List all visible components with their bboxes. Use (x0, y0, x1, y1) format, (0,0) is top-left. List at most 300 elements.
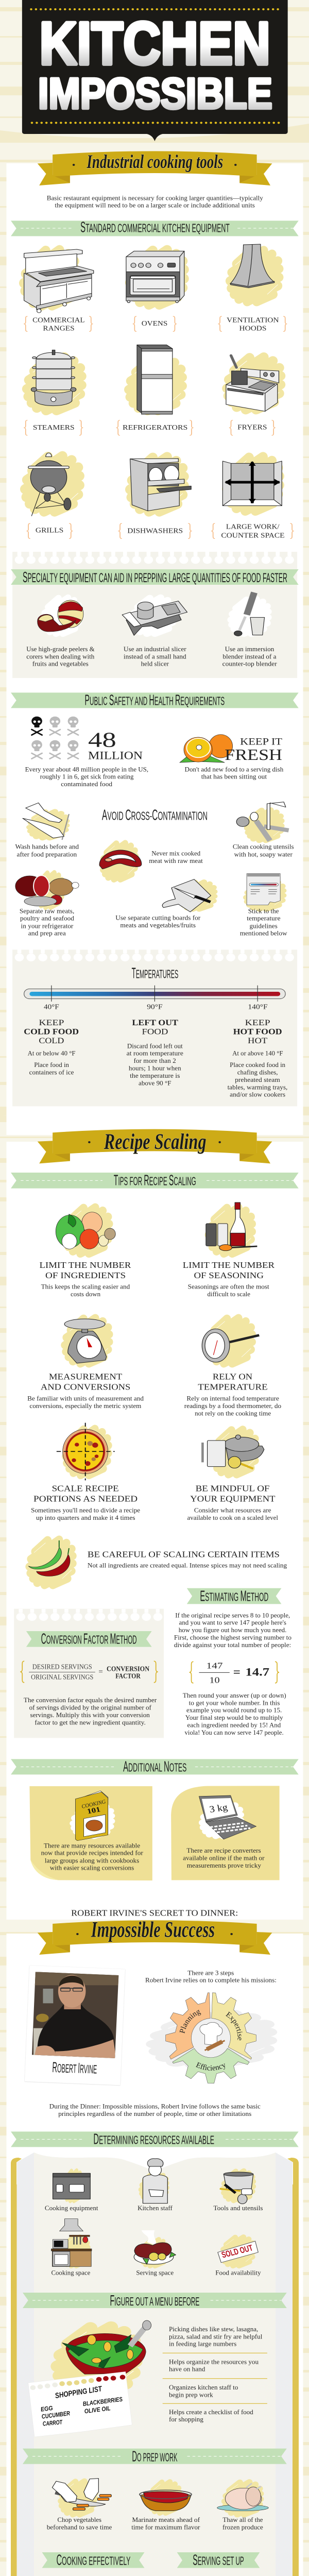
banner: public safety and health requirements (11, 692, 299, 708)
label (229, 420, 276, 435)
text: measurements prove tricky (187, 1862, 261, 1869)
icon: cookbook: 101 (87, 1806, 101, 1816)
text: corers when dealing with (26, 653, 94, 660)
text: estimating intro: how you figure out how much you need. (179, 1626, 286, 1634)
panel: specialty equipment (11, 552, 299, 678)
text (222, 646, 277, 667)
column: left out food: Discard food left out (127, 1042, 183, 1049)
icon: steak (99, 850, 142, 869)
temperature labels: 40°F (44, 1004, 59, 1011)
book main page (34, 2153, 276, 2576)
banner: do prep work: DO PREP WORK (132, 2448, 178, 2465)
label (26, 523, 73, 538)
text: temperature (247, 915, 281, 922)
text (124, 646, 186, 667)
banner: additional notes (11, 1758, 299, 1775)
temperature labels: 140°F (248, 1004, 268, 1011)
text (31, 1483, 140, 1521)
banner: public safety and health requirements: PUBLIC SAFETY AND HEALTH REQUIREMENTS (85, 692, 225, 708)
item: fryers (226, 355, 281, 435)
text: Consider what resources are (194, 1506, 271, 1514)
note card: cookbooks (29, 1786, 152, 1880)
gear labels: Expertise (226, 2011, 242, 2040)
icon: peeled apple (38, 600, 83, 632)
text: estimating explanation: Your final step would be to multiply (185, 1714, 283, 1721)
text: Chop vegetables (57, 2516, 101, 2523)
text: There are recipe converters (186, 1847, 261, 1854)
icon: cookbook: COOKING (81, 1799, 107, 1810)
icon: chili peppers (28, 1540, 70, 1576)
text: SCALE RECIPE (52, 1483, 119, 1493)
banner: figure out a menu before (23, 2293, 287, 2309)
column: keep cold food cold: KEEP (39, 1018, 64, 1027)
label: DISHWASHERS (127, 527, 183, 535)
banner: conversion factor method: CONVERSION FACTOR METHOD (41, 1631, 137, 1647)
icon: oranges (180, 735, 233, 762)
icon: salad bowl (62, 2320, 151, 2374)
shopping list note: CUCUMBER (41, 2410, 71, 2420)
formula: conversion factor: DESIRED SERVINGS (32, 1663, 92, 1671)
list: why plan the menu: Organizes kitchen staff to (169, 2384, 238, 2391)
text: time for maximum flavor (131, 2523, 200, 2531)
text: now that provide recipes intended for (41, 1850, 143, 1856)
text: estimating explanation (183, 1692, 286, 1736)
label: GRILLS (36, 527, 63, 534)
heading: avoid cross-contamination: AVOID CROSS-CONTAMINATION (102, 807, 208, 823)
text: conversion factor explanation: factor to get the new ingredient quantity. (35, 1719, 146, 1726)
text: estimating explanation: example you would round up to 15. (186, 1707, 282, 1714)
column: left out food: the temperature is (130, 1072, 180, 1079)
text: Not all ingredients are created equal. Intense spices may not need scaling (88, 1562, 287, 1569)
text (185, 766, 283, 780)
text: estimating intro: and you want to serve 147 people here's (179, 1619, 286, 1626)
text: conversion factor explanation: of servings divided by the original number of (29, 1704, 151, 1711)
item: separate raw meats (15, 873, 79, 937)
panel: conversion factor method (14, 1609, 164, 1738)
item: ovens (126, 250, 184, 331)
text: BE CAREFUL OF SCALING CERTAIN ITEMS (88, 1550, 280, 1559)
column: keep hot food hot (228, 1018, 287, 1098)
item: salad bowl and shopping list (28, 2320, 151, 2437)
item: immersion blender (222, 592, 277, 667)
label (24, 316, 93, 332)
label: RANGES (43, 325, 75, 332)
column: keep hot food hot: and/or slow cookers (230, 1091, 285, 1098)
text: conversions, especially the metric system (29, 1402, 142, 1410)
column: keep hot food hot: preheated steam (235, 1076, 280, 1083)
list: why plan the menu: Picking dishes like stew, lasagna, (169, 2326, 258, 2333)
text: estimating explanation: each ingredient needed by 15! And (187, 1722, 281, 1728)
section: public safety (15, 717, 294, 937)
text: beforehand to save time (47, 2523, 112, 2531)
resource: tools and utensils (213, 2171, 263, 2212)
text: mentioned below (240, 930, 287, 937)
text: TEMPERATURE (198, 1382, 268, 1392)
text: Don't add new food to a serving dish (185, 766, 283, 773)
tip: rely on temperature (184, 1318, 281, 1417)
icon: slicer (122, 601, 187, 635)
icon: steamer (31, 350, 76, 406)
text: in your refrigerator (21, 922, 74, 929)
text: after food preparation (17, 851, 77, 858)
item: never mix meat (99, 843, 203, 879)
gear centre with chef hat and rolling pin (193, 2020, 230, 2057)
item: large work counter space (211, 457, 294, 539)
text (20, 907, 74, 937)
text (115, 914, 201, 929)
resource: food availability (215, 2237, 261, 2276)
banner: figure out a menu before: FIGURE OUT A MENU BEFORE (110, 2293, 199, 2309)
list: why plan the menu: begin prep work (169, 2391, 213, 2398)
icon: grill (28, 453, 71, 516)
gear segment: planning (149, 1988, 229, 2060)
text: instead of a small hand (124, 653, 186, 660)
icon: hands (23, 803, 69, 840)
item: clean utensils (233, 802, 294, 858)
text: OF INGREDIENTS (45, 1270, 126, 1280)
text (187, 1483, 278, 1521)
formula: estimating: 147 (207, 1660, 222, 1671)
list: why plan the menu: Helps organize the resources you (169, 2358, 259, 2365)
column: keep hot food hot: Place cooked food in (230, 1061, 285, 1069)
item: grills (25, 453, 79, 538)
column: keep hot food hot: chafing dishes, (237, 1069, 278, 1076)
formula: conversion factor: FACTOR (115, 1672, 141, 1680)
text: Thaw all of the (222, 2516, 263, 2523)
equipment grid (24, 244, 287, 435)
scribble behind gear (156, 2014, 267, 2064)
text: BE MINDFUL OF (196, 1483, 270, 1493)
text: LIMIT THE NUMBER (183, 1260, 274, 1270)
formula: estimating: = (233, 1666, 241, 1679)
icon: vegetables (56, 1212, 115, 1249)
ribbon: impossible success: Impossible Success (91, 1917, 215, 1942)
text (184, 1372, 281, 1417)
shopping list note: BLACKBERRIES (82, 2396, 123, 2408)
column: keep hot food hot: KEEP (245, 1018, 270, 1027)
icon: chef (143, 2159, 167, 2204)
label: HOODS (239, 325, 266, 332)
panel: temperatures: TEMPERATURES (132, 965, 178, 981)
item: temperature guidelines (240, 874, 287, 937)
text: estimating intro: If the original recipe serves 8 to 10 people, (175, 1612, 290, 1619)
prep: marinate meats (131, 2482, 200, 2531)
label (24, 420, 83, 435)
ribbon: impossible success (38, 1917, 272, 1955)
icon: pizza cut into quarters (57, 1423, 115, 1480)
dotted rules (31, 9, 279, 123)
shopping list note: SHOPPING LIST (55, 2385, 103, 2400)
banner: additional notes: ADDITIONAL NOTES (123, 1758, 186, 1775)
label: COMMERCIAL (32, 316, 85, 324)
text: and prep area (28, 930, 66, 937)
text: conversion factor explanation: servings. Multiply this with your conversion (30, 1711, 150, 1719)
icon: kitchen (51, 2219, 92, 2266)
text: difficult to scale (208, 1291, 250, 1298)
icon: cutting board (162, 879, 211, 912)
column: keep cold food cold: COLD FOOD (24, 1027, 79, 1036)
caption: Robert Irvine: ROBERT IRVINE (52, 2059, 97, 2077)
text: guidelines (249, 922, 278, 929)
icon: sold out sign: SOLD OUT (220, 2243, 254, 2260)
column: keep hot food hot: tables, warming trays, (228, 1083, 287, 1091)
section: industrial cooking tools (11, 151, 299, 236)
panel: first white sheet (6, 163, 303, 1135)
banner: determining resources available (11, 2131, 299, 2147)
heading: Robert Irvine's secret: ROBERT IRVINE'S SECRET TO DINNER: (71, 1908, 238, 1918)
heading: KEEP IT (240, 737, 282, 747)
text: large groups along with cookbooks (45, 1857, 139, 1864)
text: counter-top blender (222, 660, 277, 667)
text: Use an immersion (225, 646, 274, 653)
text: This keeps the scaling easier and (41, 1283, 130, 1290)
text: AND CONVERSIONS (41, 1382, 130, 1392)
text (47, 2516, 112, 2531)
text: PORTIONS AS NEEDED (33, 1494, 138, 1503)
text: conversion factor explanation (24, 1697, 157, 1726)
resource: cooking space (51, 2219, 92, 2276)
text: roughly 1 in 6, get sick from eating (40, 773, 134, 780)
text (41, 1842, 143, 1871)
shopping list note: EGG (40, 2404, 54, 2413)
label: REFRIGERATORS (123, 424, 187, 432)
gear segment: expertise (212, 1993, 256, 2059)
text: blender instead of a (222, 653, 277, 660)
text: held slicer (141, 660, 169, 667)
icon: blender (234, 592, 265, 636)
banner: do prep work (23, 2448, 287, 2465)
icon: six skulls (31, 717, 78, 759)
list: why plan the menu: in feeding large numbers (169, 2341, 236, 2347)
gear labels (179, 2009, 242, 2071)
book cover (11, 2158, 299, 2576)
label (118, 523, 192, 538)
stat: keep it fresh (180, 735, 283, 780)
number: MILLION (88, 749, 143, 762)
label: Food availability (215, 2269, 261, 2276)
text: with easier scaling conversions (50, 1865, 134, 1871)
formula: conversion factor: = (98, 1668, 103, 1676)
text: basic principles: During the Dinner: Impossible missions, Robert Irvine follows the same basic (49, 2103, 261, 2110)
tip: measurement and conversions (27, 1318, 144, 1410)
text (40, 1260, 131, 1298)
icon: marinating bowl (140, 2490, 192, 2511)
formula: conversion factor: CONVERSION (107, 1665, 149, 1673)
text (183, 1847, 265, 1869)
icon: utensil crock (220, 2172, 253, 2204)
text: Stick to the (248, 907, 279, 914)
intro text (47, 194, 263, 209)
note card: recipe converters (171, 1786, 280, 1880)
item: wash hands (15, 803, 79, 858)
icon: hood (230, 244, 274, 288)
formula: estimating (190, 1660, 279, 1685)
label: STEAMERS (33, 424, 75, 432)
text: RELY ON (213, 1372, 252, 1381)
text: There are many resources available (44, 1842, 140, 1849)
item: slicer (122, 598, 187, 667)
label: OVENS (142, 320, 167, 328)
item: cutting boards (115, 879, 215, 929)
text: with hot, soapy water (234, 851, 293, 858)
list: why plan the menu: have on hand (169, 2366, 205, 2372)
thermometer bar (24, 986, 285, 1002)
gear segment: efficiency (170, 2028, 250, 2100)
text: estimating intro: First, choose the highest serving number to (174, 1634, 291, 1641)
label (218, 316, 287, 332)
item: steamers (24, 350, 83, 435)
icon: counter space with arrows (222, 461, 282, 506)
tip: limit ingredients (40, 1208, 131, 1298)
text: conversion factor explanation: The conversion factor equals the desired number (24, 1697, 157, 1704)
text (27, 1372, 144, 1410)
text: Use separate cutting boards for (115, 914, 201, 921)
banner: serving set up: SERVING SET UP (193, 2552, 244, 2568)
text: Every year about 48 million people in the US, (25, 766, 148, 773)
icon: chopping hands (52, 2479, 111, 2510)
text: Wash hands before and (15, 843, 79, 850)
item: peelers (26, 598, 95, 667)
text: Never mix cooked (151, 850, 200, 857)
list: why plan the menu: Helps create a checklist of food (169, 2409, 253, 2416)
icon: guideline sheet (247, 874, 280, 905)
shopping list note: OLIVE OIL (84, 2404, 111, 2415)
text (240, 907, 287, 937)
text: estimating explanation: viola! You can now serve 147 people. (185, 1729, 284, 1736)
text: estimating intro: divide against your total number of people: (174, 1641, 291, 1649)
text (183, 1260, 274, 1298)
text: basic principles: principles regardless of the number of people, time or other limitations (58, 2110, 251, 2117)
text (15, 843, 79, 858)
text: estimating intro (174, 1612, 291, 1649)
text (131, 2516, 200, 2531)
text: MEASUREMENT (49, 1372, 122, 1381)
label: Cooking space (51, 2269, 90, 2276)
panel: second white sheet (6, 1142, 303, 1920)
formula: estimating: 14.7 (245, 1666, 269, 1679)
icon: thawing chicken (217, 2483, 268, 2511)
text: YOUR EQUIPMENT (190, 1494, 276, 1503)
shopping list note (28, 2371, 132, 2437)
column: left out food: above 90 °F (139, 1080, 171, 1087)
text (88, 1550, 287, 1569)
item: refrigerators (116, 345, 194, 435)
stat: 48 million (25, 717, 148, 788)
text: Seasonings are often the most (188, 1283, 269, 1290)
text: poultry and seafood (20, 915, 74, 922)
resource: serving space (134, 2230, 176, 2276)
text: available to cook on a scaled level (187, 1514, 278, 1521)
text: meats and vegetables/fruits (120, 922, 196, 929)
label (116, 420, 194, 435)
text: Marinate meats ahead of (132, 2516, 200, 2523)
formula: conversion factor: ORIGINAL SERVINGS (31, 1673, 93, 1681)
icon: fryer (226, 355, 279, 411)
label: VENTILATION (227, 316, 279, 324)
formula: estimating: 10 (209, 1675, 220, 1685)
text: estimating explanation: to get your whole number. In this (189, 1699, 280, 1706)
text: three steps: There are 3 steps (187, 1969, 234, 1976)
banner: tips for recipe scaling: TIPS FOR RECIPE SCALING (114, 1173, 196, 1189)
label: Cooking equipment (45, 2205, 98, 2212)
icon: cookbook (76, 1791, 108, 1841)
tip: limit seasoning (183, 1202, 274, 1298)
icon: plated steak (134, 2230, 176, 2264)
column: left out food: hours; 1 hour when (129, 1065, 181, 1072)
icon: meat thermometer (202, 1329, 259, 1362)
intro text: the equipment will need to be on a larger scale or include additional units (55, 202, 255, 209)
title text (38, 9, 272, 118)
ribbon: Industrial cooking tools (38, 151, 272, 185)
label: Kitchen staff (138, 2205, 173, 2212)
text: Clean cooking utensils (233, 843, 294, 850)
column: keep hot food hot: At or above 140 °F (232, 1050, 283, 1057)
gear labels: Efficiency (196, 2062, 225, 2071)
prep: thaw produce (217, 2482, 268, 2531)
column: keep cold food cold: Place food in (34, 1061, 69, 1069)
text: three steps: Robert Irvine relies on to complete his missions: (145, 1977, 277, 1984)
icon: refrigerator (137, 345, 173, 414)
icon: utensils (236, 802, 289, 841)
tip: be mindful of your equipment (187, 1430, 278, 1521)
text: fruits and vegetables (32, 660, 89, 667)
column: keep cold food cold: COLD (39, 1036, 64, 1045)
banner: serving set up (177, 2552, 260, 2568)
text: readings by a food thermometer, do (184, 1402, 281, 1410)
panel: third white sheet (6, 1934, 303, 2576)
text: Rely on internal food temperature (186, 1395, 279, 1402)
formula: conversion factor (20, 1661, 158, 1683)
gear labels: Planning (179, 2009, 201, 2033)
column: keep cold food cold (24, 1018, 79, 1076)
column: left out food (127, 1018, 183, 1087)
column: left out food: FOOD (142, 1027, 168, 1036)
item: ventilation hoods (218, 244, 287, 332)
label: Tools and utensils (213, 2205, 263, 2212)
label: COUNTER SPACE (221, 532, 285, 539)
intro text: Basic restaurant equipment is necessary for cooking larger quantities—typically (47, 194, 263, 201)
text: LIMIT THE NUMBER (40, 1260, 131, 1270)
text: up into quarters and make it 4 times (36, 1514, 135, 1521)
list: why plan the menu: for shopping (169, 2416, 203, 2423)
icon: meats, poultry and fish (15, 875, 79, 906)
column: keep cold food cold: At or below 40 °F (28, 1050, 76, 1057)
list: why plan the menu: pizza, salad and stir fry are helpful (169, 2333, 263, 2340)
label (133, 316, 177, 331)
text (25, 766, 148, 788)
text: OF SEASONING (194, 1270, 264, 1280)
label (211, 523, 294, 539)
title block (22, 0, 288, 141)
text: Be familiar with units of measurement and (27, 1395, 144, 1402)
open book background (11, 2153, 299, 2576)
item: commercial ranges (24, 249, 94, 332)
banner: cooking effectively: COOKING EFFECTIVELY (56, 2552, 130, 2568)
text: available online if the math or (183, 1854, 265, 1861)
banner: tips for recipe scaling (11, 1173, 299, 1189)
text: three steps (145, 1969, 277, 1984)
banner: cooking effectively (42, 2552, 144, 2568)
icon: dishwasher (130, 459, 191, 511)
panel: temperatures (11, 950, 299, 1189)
temperature labels: 90°F (147, 1004, 163, 1011)
list: why plan the menu (163, 2326, 267, 2423)
text: that has been sitting out (201, 773, 267, 780)
tip: scale recipe portions (31, 1423, 140, 1521)
text (149, 850, 203, 865)
prep: chop vegetables (47, 2479, 112, 2531)
resource: kitchen staff (138, 2159, 173, 2212)
